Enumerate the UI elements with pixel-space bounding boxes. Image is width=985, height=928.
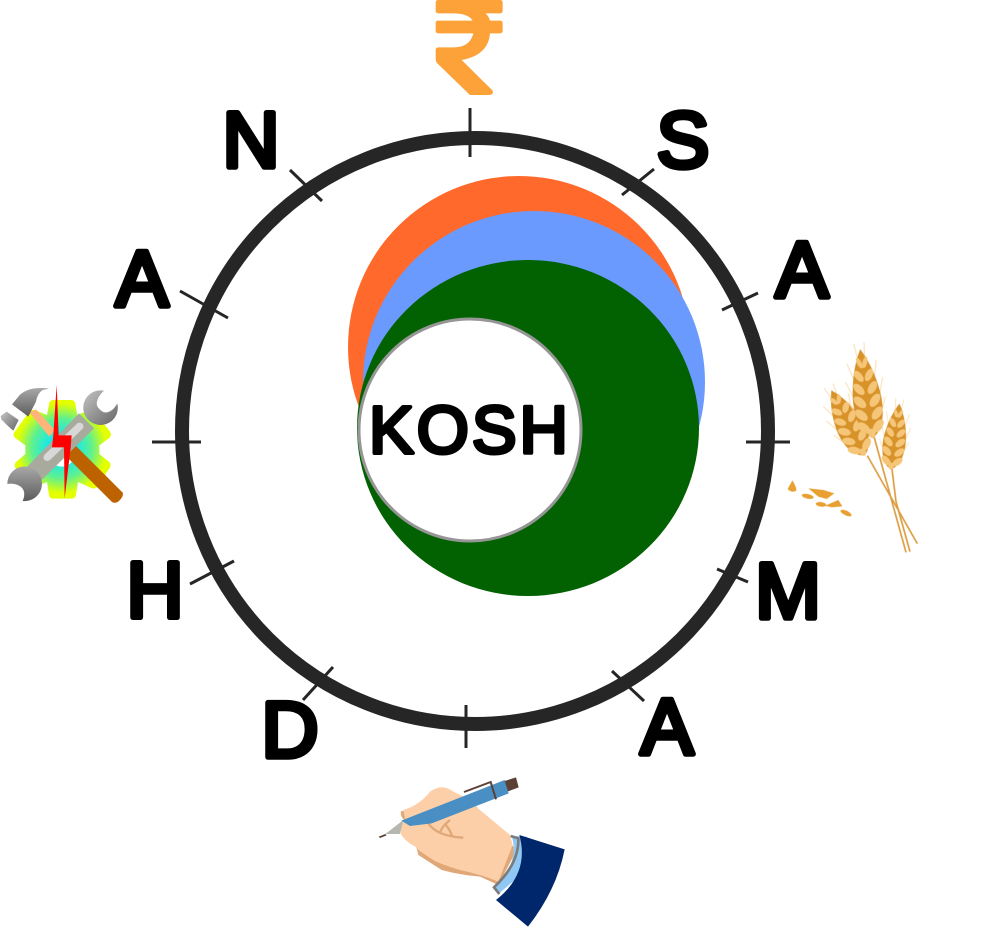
lightning bolt xyxy=(52,385,72,498)
stalks xyxy=(867,437,917,552)
letter M: M xyxy=(755,546,821,635)
cuff xyxy=(494,836,527,894)
letter A: A xyxy=(776,225,829,314)
finger crease xyxy=(428,820,463,838)
pen clip xyxy=(464,782,496,799)
ear right xyxy=(876,397,915,472)
sleeve xyxy=(496,835,565,927)
center circle with KOSH label xyxy=(359,319,581,541)
cuff edge xyxy=(494,836,518,894)
pen body xyxy=(401,780,509,826)
hammer handle xyxy=(29,409,55,437)
main ring xyxy=(182,138,768,724)
gear xyxy=(14,400,111,499)
icon: rupee symbol xyxy=(436,0,503,95)
letter S: S xyxy=(657,95,709,184)
pen end xyxy=(505,777,519,791)
loose grains xyxy=(788,480,852,518)
letter A: A xyxy=(641,682,694,771)
orange circle xyxy=(348,176,690,518)
letter D: D xyxy=(261,685,319,774)
green circle xyxy=(357,260,699,596)
hand shadow xyxy=(401,807,517,885)
pen tip xyxy=(385,820,403,834)
center circle with KOSH label: KOSH xyxy=(369,393,571,468)
tick marks xyxy=(152,108,790,748)
letter H: H xyxy=(126,545,184,634)
letter A: A xyxy=(116,234,169,323)
hand xyxy=(401,787,513,882)
letter N: N xyxy=(222,95,280,184)
hammer head xyxy=(12,388,49,417)
ear left xyxy=(813,378,880,464)
ear middle xyxy=(840,340,891,441)
wrench xyxy=(25,413,94,483)
icon: hand holding pen xyxy=(379,777,565,927)
blue circle xyxy=(363,211,705,553)
icon: wheat xyxy=(788,340,917,552)
icon: tools with gear and lightning xyxy=(1,385,123,503)
